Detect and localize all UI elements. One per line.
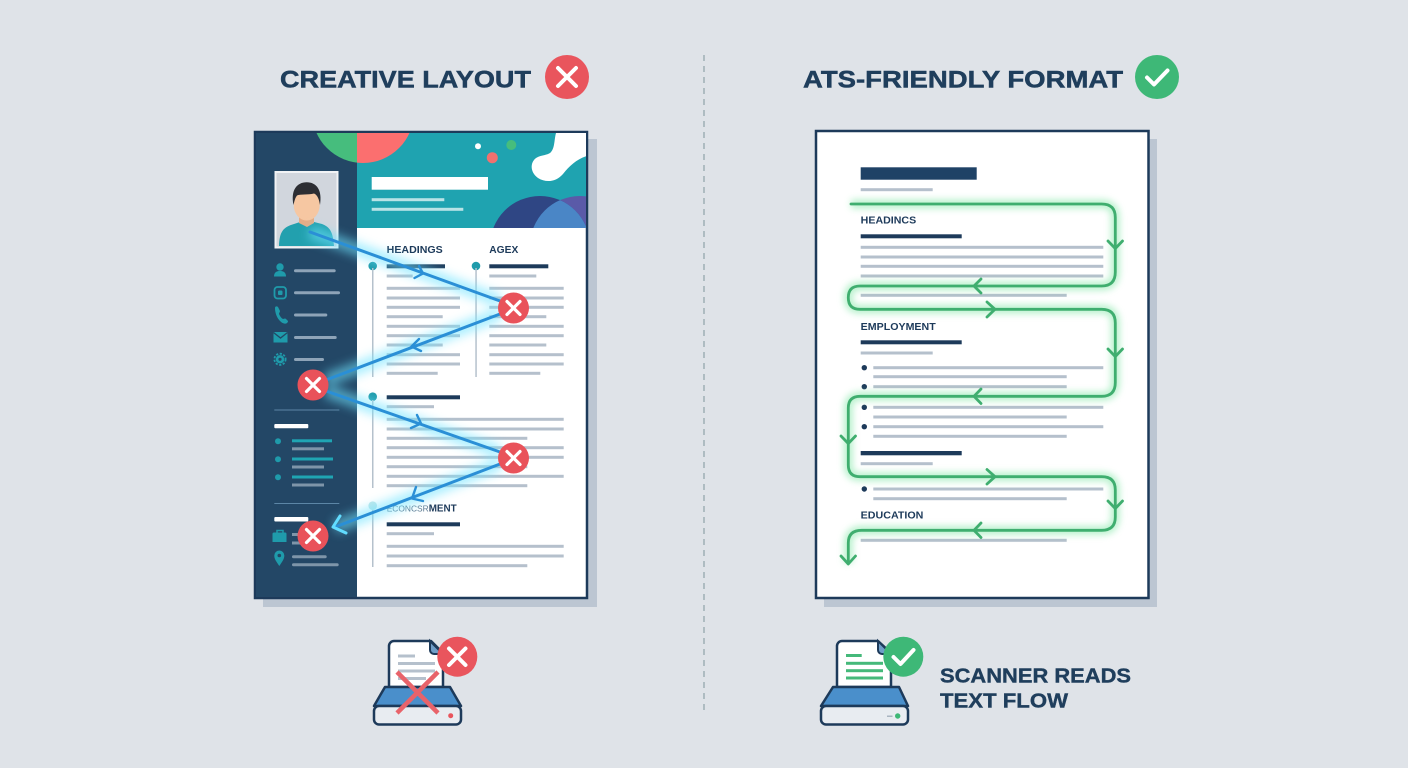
sidebar bbox=[256, 133, 357, 597]
icon: scanner pass bbox=[821, 637, 923, 724]
sidebar skills section bbox=[274, 410, 339, 486]
panel: creative resume bbox=[254, 130, 597, 607]
section: headincs: HEADINCS bbox=[861, 216, 916, 227]
error markers bbox=[298, 292, 529, 552]
direction arrows bbox=[841, 241, 1122, 564]
colorful header bbox=[357, 133, 586, 228]
heading: creative layout bbox=[280, 55, 589, 99]
section: headincs bbox=[861, 216, 1103, 297]
serpentine reading path bbox=[841, 204, 1122, 564]
caption: scanner reads text flow bbox=[940, 666, 1131, 712]
resume shadow bbox=[263, 139, 597, 607]
profile photo bbox=[276, 172, 338, 248]
middle section bbox=[368, 392, 564, 488]
heading: creative layout: CREATIVE LAYOUT bbox=[280, 66, 531, 94]
sidebar contact section bbox=[274, 503, 339, 566]
section: education: EDUCATION bbox=[861, 511, 923, 522]
ats resume shadow bbox=[824, 139, 1157, 607]
section: education bbox=[861, 511, 1067, 542]
section: employment: EMPLOYMENT bbox=[861, 322, 936, 333]
heading: ats-friendly format: ATS-FRIENDLY FORMAT bbox=[803, 66, 1123, 94]
section: employment bbox=[861, 322, 1103, 500]
zigzag reading path bbox=[310, 232, 500, 533]
contact icons bbox=[272, 263, 288, 566]
decorative circle over sidebar bbox=[316, 133, 357, 163]
contact text lines bbox=[294, 269, 340, 361]
center divider bbox=[703, 55, 705, 715]
ats resume page bbox=[816, 131, 1148, 598]
column: headings: HEADINGS bbox=[387, 245, 443, 256]
column: agex: AGEX bbox=[489, 245, 518, 256]
lower section: garbled enrollment bbox=[368, 501, 564, 567]
lower section: garbled enrollment: ECONCSRMENT bbox=[387, 504, 457, 515]
heading: ats-friendly format bbox=[803, 55, 1179, 99]
column: headings bbox=[368, 245, 460, 377]
column: agex bbox=[472, 245, 564, 377]
title block bbox=[861, 167, 977, 191]
resume page bbox=[255, 132, 587, 598]
icon: scanner fail bbox=[374, 637, 477, 724]
caption: scanner reads text flow: TEXT FLOW bbox=[940, 690, 1068, 712]
caption: scanner reads text flow: SCANNER READS bbox=[940, 666, 1131, 688]
panel: ats resume bbox=[816, 131, 1157, 607]
